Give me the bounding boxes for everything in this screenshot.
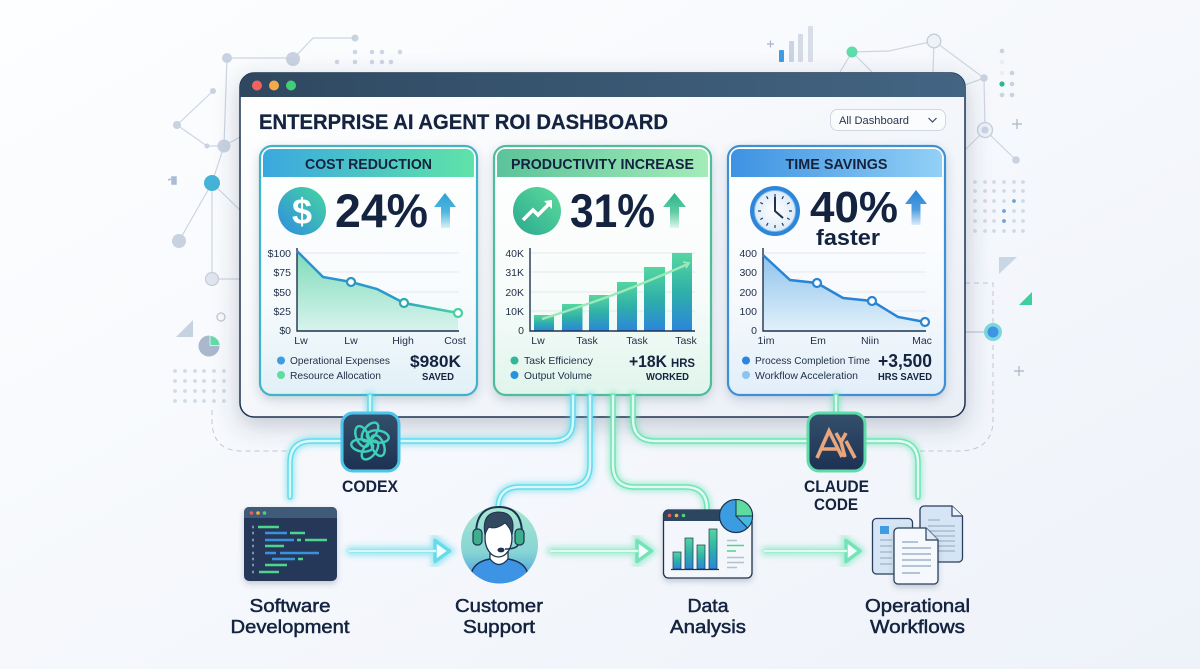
connectors: green — [613, 396, 918, 509]
productivity header — [497, 149, 708, 177]
line chart: cost: Lw — [294, 335, 308, 347]
icon: software development — [244, 507, 337, 581]
icon: up arrow — [905, 190, 927, 225]
label: customer support: Customer — [455, 595, 543, 616]
icon: clock — [750, 186, 800, 236]
line chart: time: 300 — [739, 267, 757, 279]
label: claude code: CODE — [814, 495, 858, 514]
hours saved — [878, 351, 932, 383]
cost saved: $980K — [410, 352, 462, 371]
productivity legend — [510, 355, 594, 382]
hours worked: +18K — [629, 352, 668, 371]
icon: dollar — [278, 187, 326, 235]
cost header — [263, 149, 474, 177]
metric 40% faster: faster — [816, 225, 880, 250]
label: data analysis: Analysis — [670, 616, 746, 637]
productivity legend: Output Volume — [524, 370, 592, 382]
line chart: time: 0 — [751, 325, 757, 337]
icon: codex — [342, 413, 399, 471]
bar chart: productivity: Task — [626, 335, 649, 347]
label: customer support — [455, 595, 543, 637]
hours saved: +3,500 — [878, 351, 932, 371]
icon: up arrow — [434, 193, 456, 228]
icon: claude code — [808, 413, 865, 471]
panel: productivity increase — [494, 146, 711, 395]
label: customer support: Support — [463, 616, 535, 637]
line chart: time: 1im — [758, 335, 775, 347]
window title bar — [240, 73, 965, 97]
hours worked: WORKED — [646, 371, 689, 383]
dashboard window — [240, 73, 965, 417]
line chart: time: 100 — [739, 306, 757, 318]
time legend — [742, 355, 870, 382]
bar chart: productivity — [505, 248, 698, 347]
line chart: time: 400 — [739, 248, 757, 260]
dropdown — [830, 110, 946, 130]
label: claude code: CLAUDE — [804, 477, 869, 496]
icon: up arrow — [663, 193, 686, 228]
metric 24%: 24% — [335, 184, 428, 237]
bar chart: productivity: Lw — [531, 335, 545, 347]
line chart: cost: $0 — [279, 325, 291, 337]
icon: dollar: $ — [292, 191, 312, 232]
cost legend: Operational Expenses — [290, 355, 390, 367]
line chart: cost: Cost — [444, 335, 466, 347]
line chart: time: Em — [810, 335, 826, 347]
arrow: software to support — [350, 540, 450, 562]
panel: cost reduction — [260, 146, 477, 395]
icon: customer support — [461, 506, 538, 590]
label: codex: CODEX — [342, 477, 399, 496]
cost legend: Resource Allocation — [290, 370, 381, 382]
label: operational workflows: Operational — [865, 595, 970, 616]
label: data analysis: Data — [688, 595, 729, 616]
hours saved: HRS SAVED — [878, 371, 932, 383]
cost saved: SAVED — [422, 371, 454, 383]
line chart: cost: $75 — [273, 267, 291, 279]
connectors: cyan — [290, 396, 590, 509]
productivity header: PRODUCTIVITY INCREASE — [511, 156, 694, 173]
metric 40% faster: 40% — [810, 183, 898, 232]
back document — [920, 506, 962, 562]
label: software development — [230, 595, 350, 637]
right network decoration — [767, 34, 1032, 451]
hours worked: HRS — [671, 356, 695, 370]
time legend: Workflow Acceleration — [755, 370, 858, 382]
mini bar icon — [779, 26, 813, 62]
bar chart: productivity: 20K — [505, 287, 524, 299]
cost saved — [410, 352, 462, 383]
line chart: time — [739, 248, 932, 347]
icon: trend — [513, 187, 561, 235]
dropdown: All Dashboard — [839, 115, 909, 127]
productivity legend: Task Efficiency — [524, 355, 594, 367]
cost legend — [277, 355, 390, 382]
bar chart: productivity: 10K — [505, 306, 524, 318]
arrow: data to workflows — [765, 540, 860, 562]
left document — [872, 518, 912, 574]
bar chart: productivity: 0 — [518, 325, 524, 337]
label: operational workflows — [865, 595, 970, 637]
bar chart: productivity: 31K — [505, 267, 524, 279]
time legend: Process Completion Time — [755, 355, 870, 367]
label: software development: Development — [230, 616, 350, 637]
title: ENTERPRISE AI AGENT ROI DASHBOARD — [259, 110, 668, 134]
icon: operational documents — [872, 506, 962, 584]
line chart: cost: Lw — [344, 335, 358, 347]
line chart: time: Niin — [861, 335, 879, 347]
front document — [894, 528, 938, 584]
line chart: time: 200 — [739, 287, 757, 299]
line chart: time: Mac — [912, 335, 932, 347]
cost header: COST REDUCTION — [305, 156, 432, 173]
line chart: cost — [268, 248, 466, 347]
arrow: support to data — [551, 540, 652, 562]
line chart: cost: $25 — [273, 306, 291, 318]
label: claude code — [804, 477, 869, 514]
label: data analysis — [670, 595, 746, 637]
line chart: cost: $100 — [268, 248, 291, 260]
bar chart: productivity: 40K — [505, 248, 524, 260]
metric 31%: 31% — [570, 184, 655, 237]
bar chart: productivity: Task — [576, 335, 599, 347]
time header: TIME SAVINGS — [786, 156, 888, 173]
label: software development: Software — [250, 595, 330, 616]
icon: data analysis — [664, 500, 753, 578]
line chart: cost: $50 — [273, 287, 291, 299]
line chart: cost: High — [392, 335, 414, 347]
label: operational workflows: Workflows — [870, 616, 965, 637]
hours worked — [629, 352, 695, 383]
left network decoration — [168, 34, 400, 451]
bar chart: productivity: Task — [675, 335, 698, 347]
time header — [731, 149, 942, 177]
panel: time savings — [728, 146, 945, 395]
